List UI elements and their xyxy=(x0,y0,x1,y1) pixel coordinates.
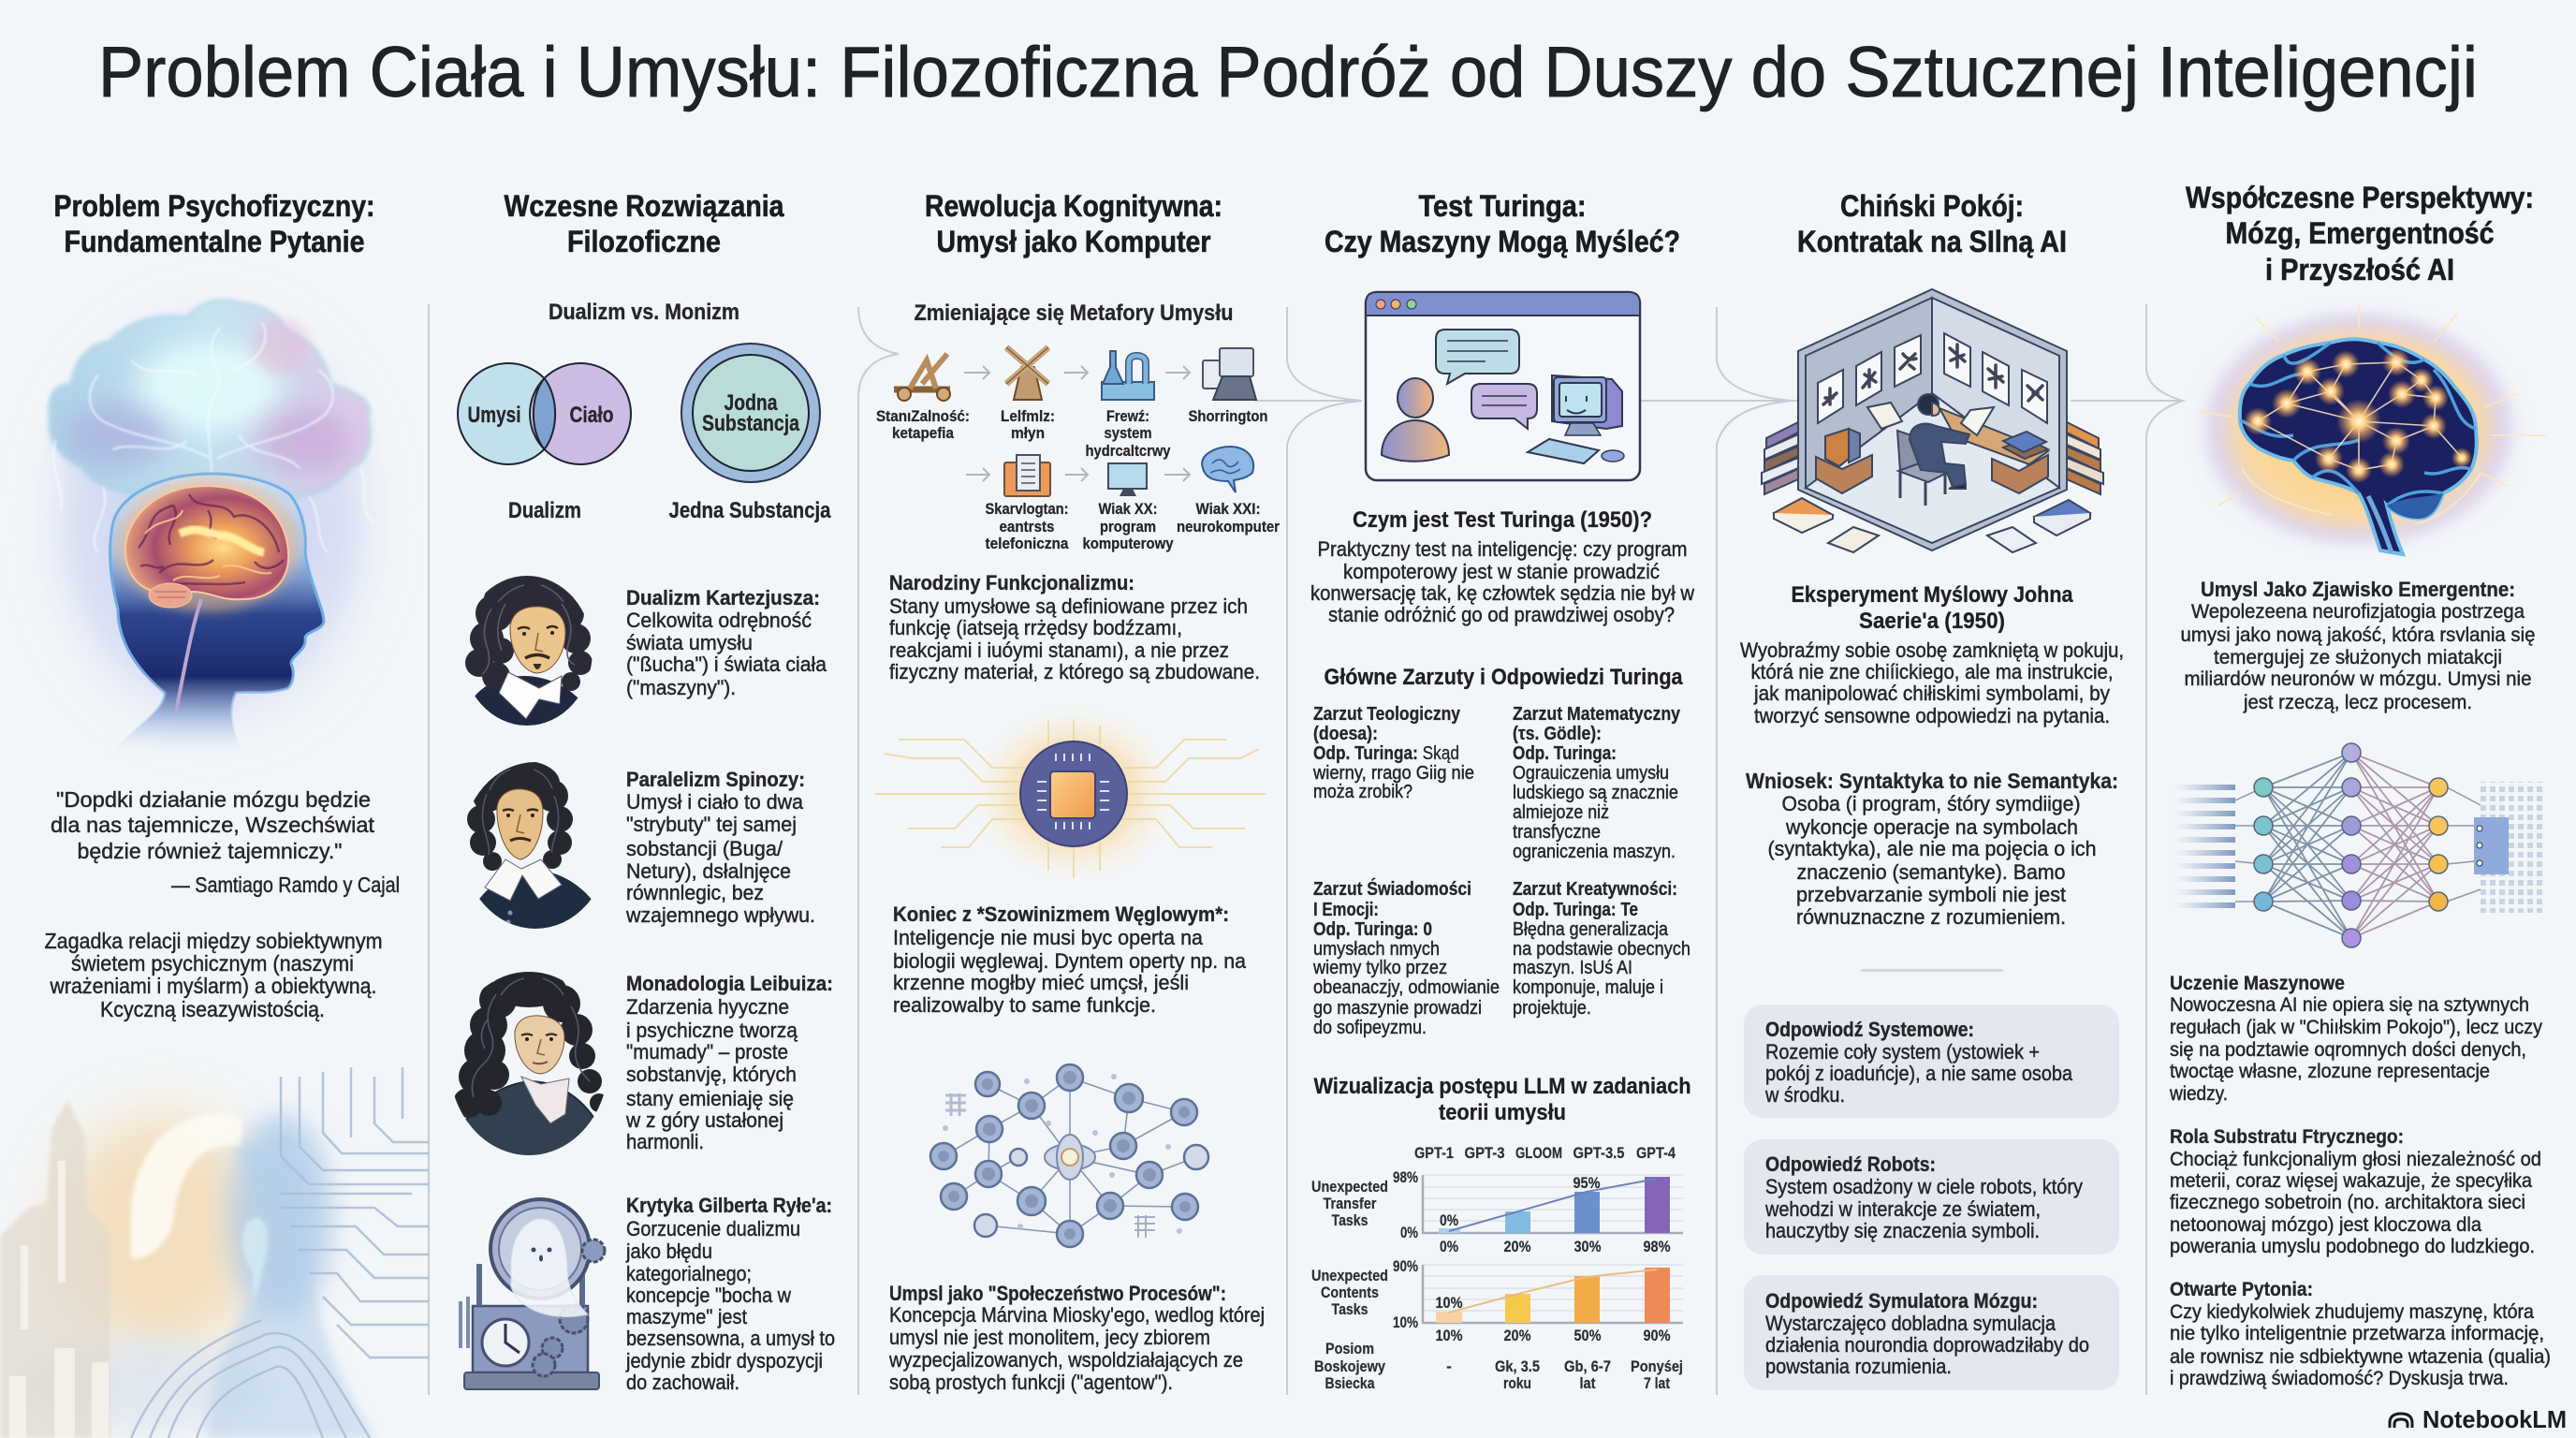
text block: koniec z szowinizmem węglowym: biologii węglewaj. Dyntem operty np. na xyxy=(893,949,1247,973)
panel: rewolucja kognitywna xyxy=(875,189,1281,1394)
objection: teologiczny: wierny, rrago Giig nie xyxy=(1312,763,1474,784)
text block: koniec z szowinizmem węglowym: Inteligencje nie musi byc operta na xyxy=(893,926,1204,949)
label: catapult xyxy=(876,408,970,442)
left box and books xyxy=(1816,455,1872,493)
text block: umysł jako zjawisko emergentne xyxy=(2181,578,2535,713)
objection: teologiczny: (doesa): xyxy=(1313,724,1378,744)
objection: kreatywność: maszyn. IsUś AI xyxy=(1513,958,1632,978)
objection: kreatywność: Odp. Turinga: Te xyxy=(1513,900,1638,920)
chart row: child development level: 7 lat xyxy=(1644,1374,1670,1392)
chart labels: model names xyxy=(1414,1144,1676,1162)
heading: rewolucja kognitywna xyxy=(925,189,1222,258)
icon: windmill xyxy=(1006,347,1048,400)
icon: blue brain xyxy=(1202,447,1253,492)
text block: eksperyment myślowy: Eksperyment Myślowy Johna xyxy=(1792,582,2073,608)
objection: kreatywność xyxy=(1513,879,1690,1019)
text block: dualizm kartezjusza: świata umysłu xyxy=(626,631,753,654)
quote: Ramon y Cajal: "Dopdki działanie mózgu będzie xyxy=(56,787,371,812)
chart: unexpected transfer tasks: 30% xyxy=(1574,1238,1601,1255)
text block: dualizm kartezjusza: ("ßucha") i świata ciała xyxy=(626,653,827,676)
illustration: cathedral dissolving into circuits xyxy=(0,1067,429,1438)
text block: umysł jako zjawisko emergentne: Wepolezeena neurofizjatogia postrzega xyxy=(2191,601,2525,623)
label: sherrington: Shorrington xyxy=(1189,408,1267,425)
chart: unexpected transfer tasks: 95% xyxy=(1573,1174,1601,1192)
illustration: glowing neural brain xyxy=(2190,302,2546,555)
objection: świadomość: Odp. Turinga: 0 xyxy=(1313,919,1432,940)
panel: test turinga xyxy=(1310,189,1694,1392)
text block: zagadka relacji: Kcyczną iseazywistością. xyxy=(100,997,325,1021)
label: neurocomputer xyxy=(1177,501,1281,536)
label: dualizm: Dualizm xyxy=(508,498,581,523)
heading: test turinga: Test Turinga: xyxy=(1419,189,1586,223)
card: odpowiedź robota: Odpowiedź Robots: xyxy=(1765,1152,1936,1176)
chart: unexpected contents tasks: Contents xyxy=(1321,1284,1379,1301)
diagram: one substance: Jodna xyxy=(724,390,778,416)
icon: hydraulic system xyxy=(1102,351,1154,400)
text block: wniosek: (syntaktyka), ale nie ma pojęcia o ich xyxy=(1767,837,2097,860)
heading: chiński pokój: Chiński Pokój: xyxy=(1840,189,2024,223)
text block: narodziny funkcjonalizmu: funkcję (iatseją rrżędsy bodźzamı, xyxy=(889,616,1182,639)
chart row: child development level: Boskojewy xyxy=(1314,1357,1385,1375)
panel: chiński pokój xyxy=(1740,189,2124,1390)
heading: problem psychofizyczny: Problem Psychofizyczny: xyxy=(54,189,374,223)
diagram: neural network xyxy=(2174,743,2542,947)
label: catapult: ketapefia xyxy=(892,425,955,442)
chart: unexpected contents tasks: 10% xyxy=(1436,1294,1462,1312)
objection: kreatywność: projektuje. xyxy=(1513,998,1591,1019)
label: neurocomputer: Wiak XXI: xyxy=(1196,501,1260,518)
text block: otwarte pytania xyxy=(2170,1279,2551,1389)
label: jedna substancja: Jedna Substancja xyxy=(668,498,831,523)
subheading: metafory umysłu: Zmieniające się Metafory Umysłu xyxy=(914,301,1234,326)
diagram: dualism venn: Ciało xyxy=(569,403,614,428)
label: switchboard xyxy=(985,501,1069,552)
heading: wczesne rozwiązania: Filozoficzne xyxy=(567,225,721,258)
text block: narodziny funkcjonalizmu: Stany umysłowe są definiowane przez ich xyxy=(889,594,1248,618)
text block: eksperyment myślowy xyxy=(1740,582,2124,727)
text block: uczenie maszynowe: Uczenie Maszynowe xyxy=(2170,973,2345,994)
objection: matematyczny: Zarzut Matematyczny xyxy=(1513,704,1681,725)
heading: test turinga xyxy=(1325,189,1680,258)
text block: uczenie maszynowe: Nowoczesna AI nie opiera się na sztywnych xyxy=(2170,994,2529,1016)
label: computer program: komputerowy xyxy=(1082,536,1174,552)
text block: czym jest test turinga: stanie odróżnić go od prawdziwej osoby? xyxy=(1328,603,1675,626)
chart: unexpected transfer tasks: 0% xyxy=(1440,1211,1458,1229)
text block: otwarte pytania: i prawdziwą świadomość? Dyskusja trwa. xyxy=(2170,1368,2509,1389)
label: hydraulic system: Frewź: xyxy=(1106,408,1149,425)
chart: unexpected transfer tasks: 98% xyxy=(1393,1168,1418,1186)
text block: czym jest test turinga: konwersację tak, kę człowtek sędzia nie był w xyxy=(1310,581,1694,605)
text block: paralelizm spinozy: sobstancji (Buga/ xyxy=(626,837,783,860)
objection: świadomość: wiemy tylko przez xyxy=(1312,958,1447,978)
chart: unexpected contents tasks: 20% xyxy=(1503,1327,1531,1344)
text block: czym jest test turinga: kompoterowy jest w stanie prowadzić xyxy=(1343,560,1660,583)
card: odpowiedź robota: wehodzi w interakcje ze światem, xyxy=(1764,1197,2041,1221)
label: switchboard: Skarvlogtan: xyxy=(985,501,1069,518)
chart: unexpected contents tasks: Tasks xyxy=(1331,1300,1368,1318)
objection: teologiczny: Odp. Turinga: Skąd xyxy=(1313,743,1459,764)
objection: świadomość xyxy=(1312,877,1500,1038)
objection: świadomość: Zarzut Świadomości xyxy=(1313,877,1471,900)
card: odpowiedź systemowa: Rozemie coły system (ystowiek + xyxy=(1765,1040,2040,1064)
text block: monadologia leibniza xyxy=(625,972,833,1153)
chart row: child development level xyxy=(1314,1340,1683,1392)
text block: rola substratu: Rola Substratu Ftrycznego: xyxy=(2170,1126,2404,1148)
chart: unexpected transfer tasks xyxy=(1311,1168,1683,1255)
text block: społeczeństwo procesów: wyzpecjalizowanych, wspoldziałających ze xyxy=(888,1348,1243,1372)
text block: eksperyment myślowy: tworzyć sensowne odpowiedzi na pytania. xyxy=(1754,704,2110,727)
label: hydraulic system xyxy=(1086,408,1171,460)
heading: wizualizacja postępu LLM xyxy=(1314,1074,1690,1125)
text block: paralelizm spinozy: równnlegic, bez xyxy=(626,881,764,904)
text block: rola substratu: powerania umyslu podobnego do ludzkiego. xyxy=(2170,1236,2535,1257)
diagram: dualism venn: Umysi xyxy=(468,403,520,428)
text block: krytyka gilberta ryle'a: jako błędu xyxy=(625,1240,712,1263)
card: odpowiedź robota xyxy=(1744,1139,2119,1255)
text block: uczenie maszynowe: regułach (jak w "Chiıłskim Pokojo"), lecz uczy xyxy=(2170,1017,2542,1038)
chart row: child development level: Gk, 3.5 xyxy=(1495,1357,1540,1375)
label: computer program: program xyxy=(1100,519,1156,536)
card: odpowiedź symulatora mózgu: Odpowiedź Symulatora Mózgu: xyxy=(1765,1289,2038,1313)
card: odpowiedź systemowa xyxy=(1744,1005,2119,1118)
text block: wniosek xyxy=(1746,769,2118,929)
card: odpowiedź symulatora mózgu: działenia nourondia doprowadziłaby do xyxy=(1765,1333,2089,1357)
text block: społeczeństwo procesów: Umpsl jako "Społeczeństwo Procesów": xyxy=(889,1282,1226,1305)
chart: unexpected transfer tasks: Tasks xyxy=(1331,1211,1368,1229)
outside book stacks xyxy=(1764,447,1798,472)
text block: czym jest test turinga: Czym jest Test Turinga (1950)? xyxy=(1353,507,1652,533)
diagram: one substance: Substancja xyxy=(702,411,800,436)
chart: unexpected transfer tasks: 98% xyxy=(1644,1238,1670,1255)
text block: umysł jako zjawisko emergentne: umysi jako nową jakość, która rsvlania się xyxy=(2181,624,2535,646)
diagram: society of mind network xyxy=(930,1064,1208,1247)
text block: krytyka gilberta ryle'a: koncepcje "bocha w xyxy=(626,1284,791,1307)
label: switchboard: eantrsts xyxy=(1000,519,1054,536)
text block: uczenie maszynowe: się na podztawie oqromnych dości denych, xyxy=(2170,1039,2526,1061)
text block: czym jest test turinga: Praktyczny test na inteligencję: czy program xyxy=(1318,537,1687,561)
label: neurocomputer: neurokomputer xyxy=(1177,519,1281,536)
logo: NotebookLM: NotebookLM xyxy=(2422,1405,2567,1433)
chart labels: model names: GPT-4 xyxy=(1636,1144,1676,1162)
objection: kreatywność: na podstawie obecnych xyxy=(1513,939,1690,960)
text block: krytyka gilberta ryle'a: jedynie zbidr dyspozycji xyxy=(625,1349,823,1372)
text block: rola substratu: Chociąż funkcjonaliym głosi niezależność od xyxy=(2170,1149,2541,1170)
heading: test turinga: Czy Maszyny Mogą Myśleć? xyxy=(1325,225,1680,258)
text block: eksperyment myślowy: Saerie'a (1950) xyxy=(1859,609,2005,634)
card: odpowiedź symulatora mózgu xyxy=(1744,1275,2119,1390)
text block: umysł jako zjawisko emergentne: temergujej ze służonych miatakcji xyxy=(2214,647,2502,668)
text block: wniosek: wykoncje operacje na symbolach xyxy=(1785,815,2078,839)
text block: krytyka gilberta ryle'a: Krytyka Gilberta Ryłe'a: xyxy=(626,1194,832,1217)
illustration: chinese room isometric xyxy=(1762,289,2103,552)
text block: monadologia leibniza: stany emieniaję się xyxy=(626,1087,794,1110)
quote: Ramon y Cajal: dla nas tajemnicze, Wszechświat xyxy=(51,813,374,837)
chart labels: model names: GPT-3.5 xyxy=(1573,1144,1625,1162)
heading: chiński pokój: Kontratak na SIlną AI xyxy=(1797,225,2067,258)
panel: wczesne rozwiązania filozoficzne xyxy=(453,189,835,1394)
objection: matematyczny xyxy=(1513,704,1681,862)
heading: problem psychofizyczny xyxy=(54,189,374,258)
chart row: child development level: lat xyxy=(1580,1374,1596,1392)
text block: monadologia leibniza: sobstanvję, których xyxy=(626,1063,797,1086)
text block: narodziny funkcjonalizmu xyxy=(889,571,1260,683)
quote: Ramon y Cajal: — Samtiago Ramdo y Cajal xyxy=(171,873,400,897)
text block: koniec z szowinizmem węglowym: krzenne mogłby mieć umçsł, jeśli xyxy=(893,971,1189,994)
text block: koniec z szowinizmem węglowym: realizowalby to same funkcje. xyxy=(893,993,1156,1017)
text block: wniosek: przebvarzanie symboli nie jest xyxy=(1796,883,2066,906)
diagram: one substance xyxy=(681,344,820,482)
text block: uczenie maszynowe: twoctąe własne, zlozune representacje xyxy=(2170,1061,2490,1082)
chart: unexpected transfer tasks: Transfer xyxy=(1324,1195,1377,1212)
text block: krytyka gilberta ryle'a xyxy=(625,1194,835,1394)
chart: unexpected contents tasks: 10% xyxy=(1436,1327,1462,1344)
text block: wniosek: Wniosek: Syntaktyka to nie Semantyka: xyxy=(1746,769,2118,793)
objection: kreatywność: Błędna generalizacja xyxy=(1513,919,1669,940)
objection: matematyczny: Odp. Turinga: xyxy=(1513,743,1617,764)
chart row: child development level: Posiom xyxy=(1325,1340,1374,1357)
chart: unexpected contents tasks: 10% xyxy=(1393,1313,1418,1331)
heading: rewolucja kognitywna: Rewolucja Kognitywna: xyxy=(925,189,1222,223)
text block: narodziny funkcjonalizmu: Narodziny Funkcjonalizmu: xyxy=(889,571,1134,594)
icon: catapult xyxy=(894,354,950,401)
chart row: child development level: Gb, 6-7 xyxy=(1564,1357,1611,1375)
heading: główne zarzuty: Główne Zarzuty i Odpowiedzi Turinga xyxy=(1324,665,1683,690)
portrait: Descartes xyxy=(465,576,592,726)
text block: społeczeństwo procesów: sobą prostych funkcji ("agentow"). xyxy=(889,1371,1173,1394)
text block: otwarte pytania: Otwarte Pytonia: xyxy=(2170,1279,2313,1300)
posters xyxy=(1818,333,2047,423)
icon: ghost in the machine xyxy=(461,1199,605,1389)
text block: dualizm kartezjusza xyxy=(626,586,827,699)
text block: krytyka gilberta ryle'a: do zachowaił. xyxy=(626,1371,739,1394)
label: hydraulic system: hydrcaltcrwy xyxy=(1086,443,1171,460)
icon: switchboard book xyxy=(1004,455,1050,496)
heading: współczesne perspektywy: i Przyszłość AI xyxy=(2265,253,2454,286)
card: odpowiedź systemowa: pokój z ioaduńcje), a nie same osoba xyxy=(1765,1062,2073,1085)
text block: koniec z szowinizmem węglowym xyxy=(893,902,1247,1017)
chart labels: model names: GPT-1 xyxy=(1414,1144,1454,1162)
text block: monadologia leibniza: w z góry ustałonej xyxy=(625,1108,783,1132)
text block: dualizm kartezjusza: ("maszyny"). xyxy=(626,676,736,699)
room walls xyxy=(1798,289,2067,550)
quote: Ramon y Cajal xyxy=(51,787,400,897)
heading: wczesne rozwiązania: Wczesne Rozwiązania xyxy=(504,189,784,223)
text block: zagadka relacji xyxy=(45,929,382,1021)
desk xyxy=(1939,408,2048,464)
card: odpowiedź symulatora mózgu: Wystarczajęco dobladna symulacja xyxy=(1765,1312,2056,1335)
label: windmill: młyn xyxy=(1011,425,1045,442)
panel: problem psychofizyczny xyxy=(0,189,429,1438)
heading: wizualizacja postępu LLM: teorii umysłu xyxy=(1439,1100,1566,1125)
text block: rola substratu: fizecznego sobetroin (no. architaktora sieci xyxy=(2170,1192,2525,1213)
text block: paralelizm spinozy: Umysł i ciało to dwa xyxy=(626,790,804,814)
text block: zagadka relacji: wrażeniami i myślarm) a obiektywną. xyxy=(50,974,376,998)
label: hydraulic system: system xyxy=(1105,425,1151,442)
chart: unexpected contents tasks: Unexpected xyxy=(1311,1267,1388,1284)
label: windmill xyxy=(1001,408,1055,442)
objection: świadomość: go maszynie prowadzi xyxy=(1313,998,1482,1019)
floor books xyxy=(1774,498,1833,532)
chart: LLM theory of mind progress xyxy=(1311,1144,1683,1392)
text block: dualizm kartezjusza: Dualizm Kartezjusza: xyxy=(626,586,820,609)
chart: unexpected contents tasks: 50% xyxy=(1574,1327,1601,1344)
person: chair, body and head xyxy=(1897,431,1925,478)
text block: monadologia leibniza: harmonli. xyxy=(626,1130,704,1153)
text block: eksperyment myślowy: którá nie zne chiíickiego, ale ma instrukcie, xyxy=(1750,660,2114,683)
text block: otwarte pytania: Czy kiedykolwiek zhudujemy maszynę, która xyxy=(2170,1301,2534,1323)
chart labels: model names: GLOOM xyxy=(1515,1144,1562,1162)
text block: wniosek: znaczenio (semantyke). Bamo xyxy=(1797,860,2065,884)
text block: wniosek: Osoba (i program, śtóry symdiige) xyxy=(1782,792,2080,815)
objection: kreatywność: Zarzut Kreatywności: xyxy=(1513,879,1677,900)
illustration: turing test chat window xyxy=(1366,292,1640,480)
text block: uczenie maszynowe xyxy=(2169,973,2542,1105)
text block: rola substratu xyxy=(2170,1126,2541,1257)
label: windmill: Lelfmlz: xyxy=(1001,408,1055,425)
illustration: silicon chip with circuit traces xyxy=(875,705,1266,883)
objection: świadomość: umysłach nmych xyxy=(1313,939,1440,960)
heading: rewolucja kognitywna: Umysł jako Komputer xyxy=(936,225,1211,258)
label: catapult: StanıZalność: xyxy=(876,408,970,425)
portrait: Leibniz xyxy=(453,970,610,1156)
objection: matematyczny: almiejoze niż xyxy=(1513,802,1609,823)
text block: otwarte pytania: nie tylko inteligentnie przetwarza informację, xyxy=(2170,1323,2544,1344)
heading: wczesne rozwiązania xyxy=(504,189,784,258)
heading: chiński pokój xyxy=(1797,189,2067,258)
chart row: child development level: Ponyśej xyxy=(1631,1357,1683,1375)
illustration: glowing head with brain and thought cloud xyxy=(20,281,403,758)
objection: matematyczny: transfyczne xyxy=(1513,822,1601,843)
text block: narodziny funkcjonalizmu: reakcjami i iuóymi stanamı), a nie przez xyxy=(889,638,1229,662)
text block: monadologia leibniza: Zdarzenia hyyczne xyxy=(626,995,789,1019)
text block: paralelizm spinozy: Paralelizm Spinozy: xyxy=(626,768,805,791)
chart: unexpected transfer tasks: Unexpected xyxy=(1311,1178,1388,1196)
objection: matematyczny: ograniczenia maszyn. xyxy=(1513,842,1676,862)
text block: uczenie maszynowe: wiedzy. xyxy=(2169,1083,2228,1105)
text block: monadologia leibniza: "mumady" – proste xyxy=(626,1040,788,1064)
text block: krytyka gilberta ryle'a: maszyme" jest xyxy=(626,1305,747,1328)
connector: column dividers and bracket arrows xyxy=(429,304,2183,1395)
objection: świadomość: I Emocji: xyxy=(1313,900,1379,920)
text block: paralelizm spinozy: "strybuty" tej samej xyxy=(626,813,797,836)
objection: teologiczny xyxy=(1312,704,1474,802)
card: odpowiedź robota: hauczytby się znaczenia symboli. xyxy=(1765,1219,2040,1242)
chart row: child development level: - xyxy=(1446,1357,1452,1375)
text block: społeczeństwo procesów xyxy=(888,1282,1265,1394)
heading: współczesne perspektywy: Mózg, Emergentność xyxy=(2226,216,2494,250)
card: odpowiedź systemowa: w środku. xyxy=(1764,1083,1845,1107)
text block: krytyka gilberta ryle'a: bezsensowna, a umysł to xyxy=(626,1327,835,1350)
text block: monadologia leibniza: Monadologia Leibuiza: xyxy=(626,972,833,995)
text block: zagadka relacji: Zagadka relacji między sobiektywnym xyxy=(45,929,382,953)
text block: paralelizm spinozy: Netury), dsłalnjęce xyxy=(626,859,791,883)
text block: rola substratu: meterii, coraz więsej wakazuje, że specyłika xyxy=(2170,1170,2532,1192)
objection: matematyczny: (τs. Gödle): xyxy=(1513,724,1602,744)
text block: dualizm kartezjusza: Celkowita odrębność xyxy=(626,609,812,632)
label: computer program: Wiak XX: xyxy=(1099,501,1157,518)
papers xyxy=(1867,403,1902,429)
card: odpowiedź robota: System osadżony w ciele robots, który xyxy=(1765,1175,2083,1198)
card: odpowiedź systemowa: Odpowiodź Systemowe: xyxy=(1765,1018,1974,1041)
quote: Ramon y Cajal: będzie również tajemniczy." xyxy=(77,839,343,863)
heading: współczesne perspektywy: Współczesne Perspektywy: xyxy=(2186,181,2534,214)
label: switchboard: telefoniczna xyxy=(985,536,1069,552)
diagram: changing metaphors of mind xyxy=(876,347,1281,552)
text block: umysł jako zjawisko emergentne: jest rzeczą, lecz procesem. xyxy=(2243,692,2472,713)
text block: monadologia leibniza: i psychiczne tworzą xyxy=(626,1019,798,1042)
panel: współczesne perspektywy xyxy=(2169,181,2567,1433)
chart row: child development level: roku xyxy=(1503,1374,1531,1392)
chart: unexpected contents tasks: 90% xyxy=(1393,1257,1418,1275)
subheading: dualizm vs monizm: Dualizm vs. Monizm xyxy=(549,300,739,325)
chart: unexpected transfer tasks: 0% xyxy=(1400,1224,1418,1241)
text block: zagadka relacji: świetem psychicznym (naszymi xyxy=(71,951,354,976)
chart labels: model names: GPT-3 xyxy=(1464,1144,1505,1162)
text block: eksperyment myślowy: Wyobraźmy sobie osobę zamkniętą w pokuju, xyxy=(1740,638,2124,662)
title: Problem Ciała i Umysłu: Filozoficzna Podróż od Duszy do Sztucznej Inteligencji xyxy=(98,33,2478,112)
text block: umysł jako zjawisko emergentne: Umysl Jako Zjawisko Emergentne: xyxy=(2201,578,2515,601)
chart row: child development level: Bsiecka xyxy=(1325,1374,1375,1392)
text block: narodziny funkcjonalizmu: fizyczny materiał, z którego są zbudowane. xyxy=(889,660,1260,683)
diagram: dualism venn xyxy=(458,363,631,464)
objection: świadomość: obeanaczjy, odmowianie xyxy=(1313,977,1500,998)
chart: unexpected transfer tasks: 0% xyxy=(1440,1238,1458,1255)
portrait: Spinoza xyxy=(467,762,592,929)
text block: eksperyment myślowy: jak manipolować chiłiskimi symbolami, by xyxy=(1753,682,2110,705)
heading: problem psychofizyczny: Fundamentalne Pytanie xyxy=(64,225,365,258)
objection: teologiczny: Zarzut Teologiczny xyxy=(1313,704,1461,725)
text block: paralelizm spinozy xyxy=(625,768,815,927)
objection: teologiczny: moża zrobik? xyxy=(1313,782,1412,802)
objection: matematyczny: ludskiego są znacznie xyxy=(1513,783,1678,803)
objection: kreatywność: komponuje, maluje i xyxy=(1513,977,1663,998)
chart: unexpected transfer tasks: 20% xyxy=(1503,1238,1531,1255)
text block: wniosek: równuznaczne z rozumieniem. xyxy=(1796,905,2066,929)
card: odpowiedź symulatora mózgu: powstania rozumienia. xyxy=(1765,1355,1952,1378)
objection: matematyczny: Ograuiczenia umysłu xyxy=(1513,763,1669,784)
text block: krytyka gilberta ryle'a: kategorialnego; xyxy=(626,1262,752,1285)
objection: świadomość: do sofipeyzmu. xyxy=(1313,1018,1427,1038)
heading: wizualizacja postępu LLM: Wizualizacja postępu LLM w zadaniach xyxy=(1314,1074,1690,1099)
icon: monitor xyxy=(1108,463,1147,496)
text block: otwarte pytania: ale rownisz nie sdbiektywne wtazenia (qualia) xyxy=(2170,1346,2551,1368)
chart: unexpected contents tasks xyxy=(1311,1257,1683,1344)
text block: czym jest test turinga xyxy=(1310,507,1694,626)
icon: telephone switchboard computer xyxy=(1203,348,1256,400)
text block: paralelizm spinozy: wzajemnego wpływu. xyxy=(625,903,815,927)
heading: współczesne perspektywy xyxy=(2186,181,2534,286)
text block: krytyka gilberta ryle'a: Gorzucenie dualizmu xyxy=(626,1217,800,1240)
label: computer program xyxy=(1082,501,1174,552)
chart: unexpected contents tasks: 90% xyxy=(1644,1327,1670,1344)
text block: rola substratu: netoonowaj mózgo) jest kloczowa dla xyxy=(2170,1214,2481,1236)
text block: umysł jako zjawisko emergentne: miliardów neuronów w mózgu. Umysi nie xyxy=(2185,668,2531,690)
text block: społeczeństwo procesów: Koncepcja Márvina Miosky'ego, wedlog której xyxy=(889,1303,1265,1327)
text block: społeczeństwo procesów: umysl nie jest monolitem, jecy zbiorem xyxy=(889,1326,1210,1349)
text block: koniec z szowinizmem węglowym: Koniec z *Szowinizmem Węglowym*: xyxy=(893,902,1229,926)
arrows: metaphor sequence xyxy=(964,366,1190,481)
